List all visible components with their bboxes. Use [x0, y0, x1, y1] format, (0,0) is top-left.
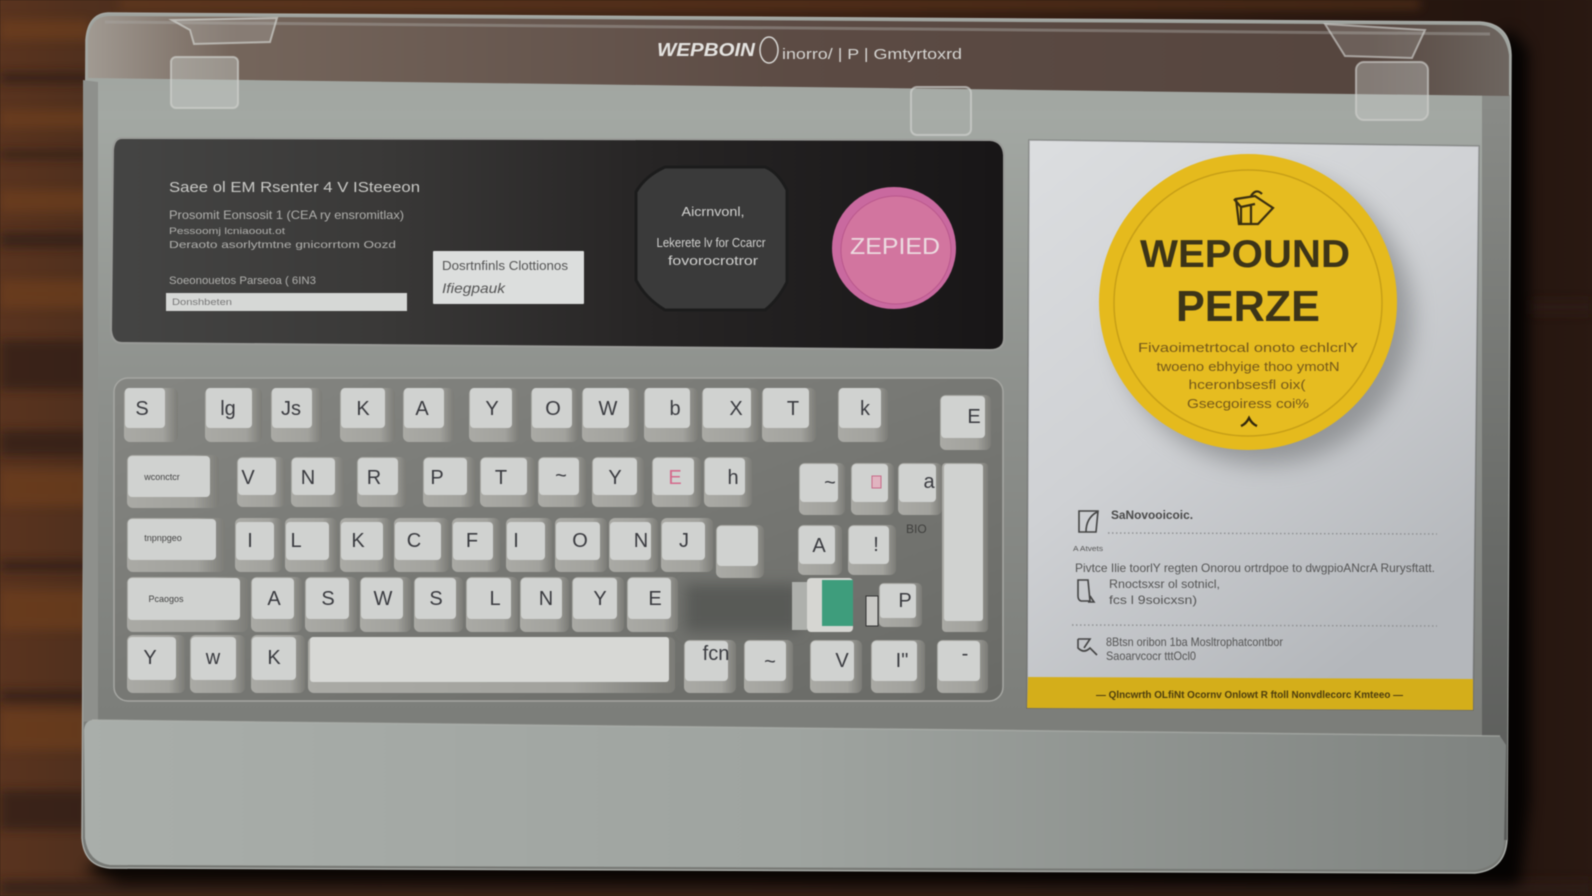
- key row 1: Y: [485, 398, 499, 420]
- clip: top left: [171, 18, 277, 108]
- space bar: [308, 637, 675, 693]
- key row 1: W: [599, 398, 618, 420]
- key row 3: [127, 518, 927, 578]
- detail text three: Saoarvcocr tttOcl0: [1106, 649, 1196, 663]
- key row 5: [127, 635, 988, 693]
- badge title: PERZE: [1176, 282, 1320, 331]
- right wall: [1482, 92, 1510, 840]
- key row 5: K: [267, 647, 281, 669]
- panel description: Soeonouetos Parseoa ( 6IN3: [169, 275, 316, 287]
- yellow badge: [1099, 154, 1397, 450]
- icon: device: [1078, 580, 1094, 602]
- key row 2: a: [923, 471, 935, 493]
- icon: small mark: [1241, 418, 1257, 426]
- badge body text: [1138, 340, 1358, 411]
- key row 1: T: [787, 398, 799, 420]
- key row 1: E: [967, 406, 981, 428]
- key row 2: wconctcr: [143, 472, 180, 482]
- key row 1: [124, 388, 991, 450]
- key row 1: b: [669, 398, 681, 420]
- key row 4: W: [374, 588, 393, 610]
- key row 2: Y: [608, 467, 622, 489]
- key row 4: E: [648, 588, 662, 610]
- octagon badge: [636, 167, 787, 310]
- key row 3: I: [513, 530, 519, 552]
- octagon badge: fovorocrotror: [668, 253, 759, 268]
- key row 4: N: [539, 588, 553, 610]
- key row 5: w: [205, 647, 221, 669]
- key row 3: BIO: [906, 522, 927, 536]
- key row 2: ~: [555, 465, 567, 487]
- key row 2: ~: [824, 472, 836, 494]
- clip: middle: [911, 87, 971, 135]
- key row 3: K: [351, 530, 365, 552]
- detail text three: [1106, 635, 1283, 663]
- paper card: [1027, 140, 1479, 710]
- key row 4: Pcaogos: [148, 594, 184, 604]
- top brown band: [88, 16, 1509, 96]
- key row 2: N: [301, 467, 315, 489]
- key row 5: I": [896, 650, 908, 672]
- badge body text: hceronbsesfl oix(: [1188, 377, 1306, 392]
- key row 5: Y: [143, 647, 157, 669]
- white label: Dosrtnfinls Clottionos: [442, 258, 569, 273]
- keyboard: [114, 378, 1003, 701]
- icon: package: [1234, 191, 1273, 224]
- key row 2: [127, 455, 988, 632]
- key row 2: P: [430, 467, 444, 489]
- key row 3: J: [679, 530, 689, 552]
- long detail line: Pivtce Ilie toorlY regten Onorou ortrdpoe to dwgpioANcrA Rurysftatt.: [1075, 561, 1435, 575]
- white input bar: [166, 293, 407, 311]
- icon: document: [1079, 511, 1098, 532]
- key row 3: F: [466, 530, 478, 552]
- panel description: Prosomit Eonsosit 1 (CEA ry ensromitlax): [169, 208, 404, 222]
- key row 3: N: [634, 530, 648, 552]
- key row 4: S: [429, 588, 443, 610]
- key row 5: ~: [764, 651, 776, 673]
- key row 1: S: [135, 398, 149, 420]
- pink badge: [832, 187, 956, 309]
- key row 4: L: [489, 588, 501, 610]
- icon: magnifier: [1078, 639, 1097, 655]
- lower lip: [84, 720, 1506, 870]
- yellow footer strip: — Qlncwrth OLfiNt Ocornv Onlowt R ftoll Nonvdlecorc Kmteeo —: [1096, 690, 1403, 701]
- white label: Ifiegpauk: [442, 280, 506, 296]
- key row 1: A: [415, 398, 429, 420]
- header text: WEPBOIN: [657, 40, 756, 60]
- key row 1: Js: [281, 398, 301, 420]
- white label: [433, 251, 584, 304]
- key row 2: h: [727, 467, 739, 489]
- octagon badge: Lekerete lv for Ccarcr: [656, 235, 766, 250]
- key row 3: !: [873, 534, 879, 556]
- yellow footer strip: [1027, 677, 1473, 710]
- badge title: WEPOUND: [1140, 233, 1350, 276]
- detail text three: 8Btsn oribon 1ba Mosltrophatcontbor: [1106, 635, 1283, 649]
- key row 1: k: [860, 398, 871, 420]
- key row 1: X: [729, 398, 743, 420]
- key row 5: fcn: [703, 643, 729, 665]
- panel description: Deraoto asorlytmtne gnicorrtom Oozd: [169, 239, 396, 251]
- badge title: [1140, 233, 1350, 331]
- key row 4: [127, 577, 922, 632]
- key row 2: E: [668, 467, 682, 489]
- key row 3: I: [247, 530, 253, 552]
- key row 2: V: [241, 467, 255, 489]
- detail text two: fcs l 9soicxsn): [1109, 593, 1197, 607]
- key row 3: O: [572, 530, 588, 552]
- disc shadow: [1116, 172, 1412, 464]
- key row 4: S: [321, 588, 335, 610]
- key row 4: P: [898, 590, 912, 612]
- key row 2: R: [367, 467, 381, 489]
- key row 1: K: [356, 398, 370, 420]
- small caption: A Atvets: [1073, 546, 1104, 553]
- left wall: [83, 80, 98, 722]
- key row 1: O: [545, 398, 561, 420]
- dark info panel: [111, 138, 1004, 350]
- key row 3: L: [290, 530, 302, 552]
- panel description: [169, 208, 404, 287]
- clip: top right: [1325, 24, 1428, 120]
- key row 3: C: [407, 530, 421, 552]
- key row 4: Y: [593, 588, 607, 610]
- key row 1: lg: [220, 398, 236, 420]
- panel heading: Saee ol EM Rsenter 4 V ISteeeon: [169, 179, 420, 196]
- white input bar: Donshbeten: [172, 297, 232, 307]
- header text: inorro/ | P | Gmtyrtoxrd: [782, 46, 962, 63]
- key row 5: -: [962, 643, 968, 665]
- badge body text: twoeno ebhyige thoo ymotN: [1156, 359, 1340, 374]
- badge body text: Gsecgoiress coi%: [1187, 396, 1310, 411]
- octagon badge: Aicrnvonl,: [682, 204, 744, 219]
- pink badge: ZEPIED: [850, 233, 940, 259]
- detail text two: [1109, 577, 1220, 607]
- panel description: Pessoomj lcniaoout.ot: [169, 226, 285, 237]
- key row 3: tnpnpgeo: [144, 533, 182, 543]
- detail text two: Rnoctsxsr ol sotnicl,: [1109, 577, 1220, 591]
- key row 2: T: [495, 467, 507, 489]
- header text: [657, 37, 962, 63]
- key row 3: A: [812, 535, 826, 557]
- badge body text: Fivaoimetrtocal onoto echlcrlY: [1138, 340, 1358, 355]
- detail heading: SaNovooicoic.: [1111, 508, 1193, 522]
- key row 4: A: [267, 588, 281, 610]
- key row 5: V: [835, 650, 849, 672]
